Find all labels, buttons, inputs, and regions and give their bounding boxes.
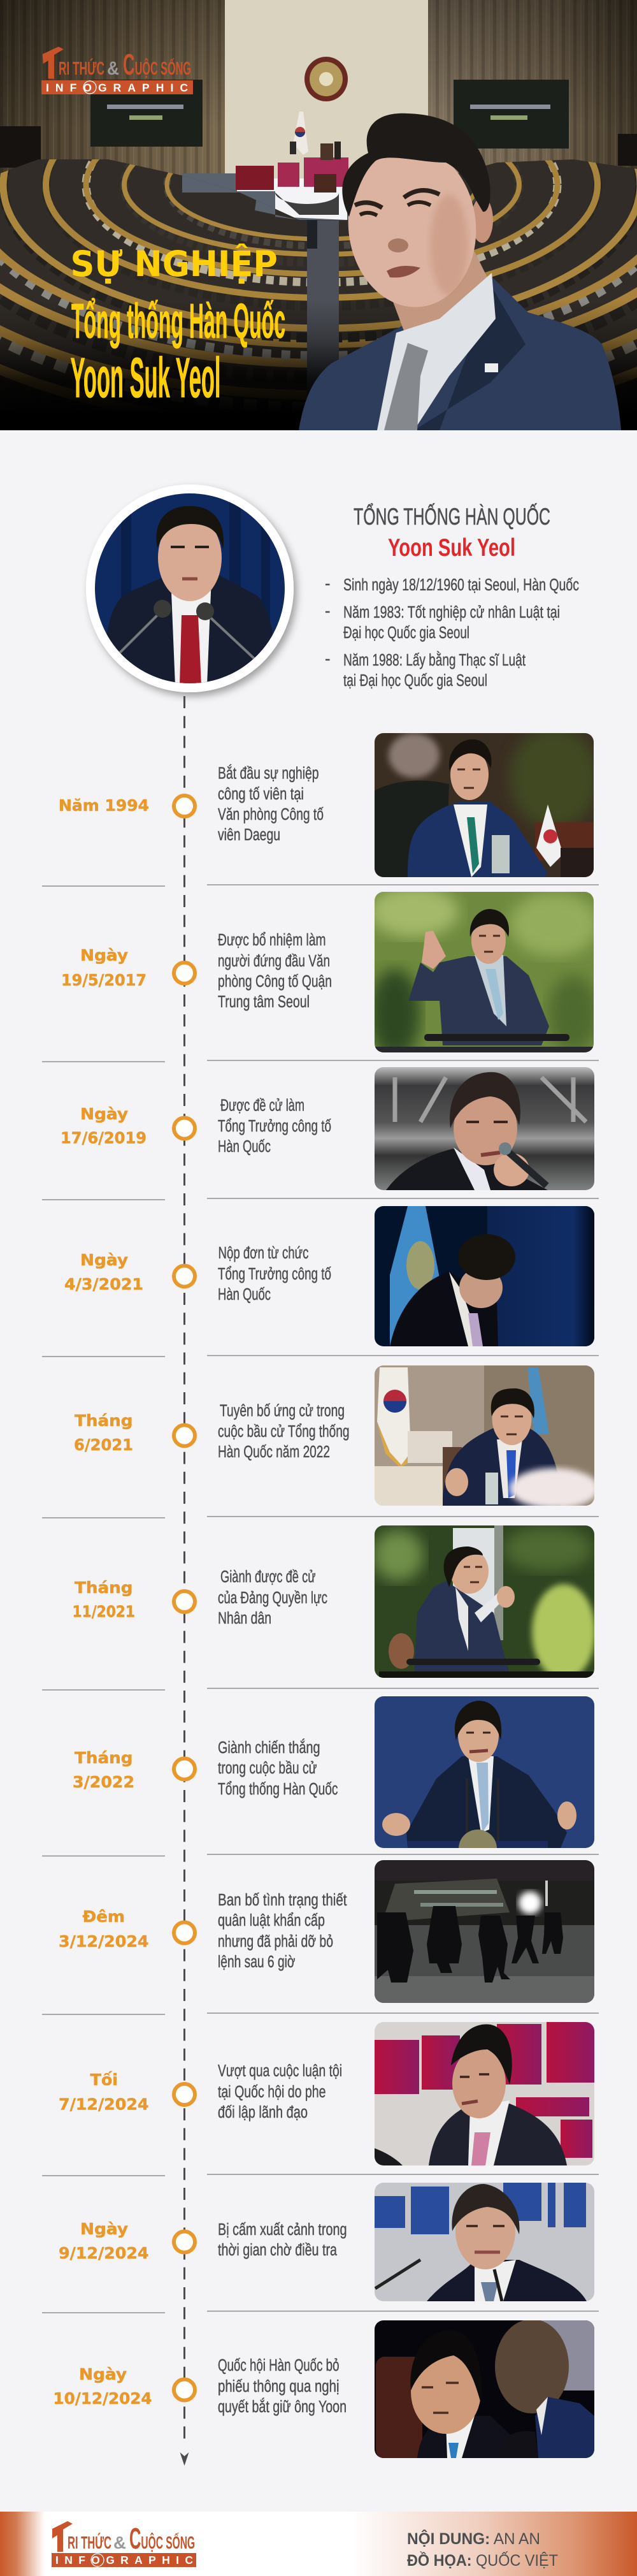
title	[70, 244, 285, 409]
description: đối lập lãnh đạo	[218, 2104, 308, 2121]
description: Bị cấm xuất cảnh trong	[218, 2221, 347, 2239]
row 1: Năm 1994	[59, 727, 599, 877]
floor	[182, 173, 348, 220]
description: Được đề cử làm	[220, 1096, 304, 1114]
profile name: Yoon Suk Yeol	[388, 534, 515, 562]
row 4: Ngày 4/3/2021	[64, 1206, 594, 1346]
row 3: Ngày 17/6/2019	[61, 1067, 594, 1190]
date	[73, 1749, 134, 1791]
description: quyết bắt giữ ông Yoon	[218, 2398, 347, 2416]
date: Ngày	[80, 1251, 128, 1269]
row 11: Ngày 10/12/2024	[54, 2319, 594, 2459]
photo: speaking into microphone	[375, 1067, 594, 1190]
ear	[473, 200, 493, 243]
description: quân luật khẩn cấp	[218, 1912, 325, 1930]
description: phòng Công tố Quận	[218, 973, 332, 991]
timeline dashed line	[180, 696, 189, 2466]
description: viên Daegu	[218, 826, 280, 844]
photo: victory speech at podium	[375, 1696, 594, 1868]
description: Bắt đầu sự nghiệp	[218, 764, 319, 783]
timeline node	[174, 2379, 195, 2401]
description	[218, 1738, 338, 1798]
description	[218, 931, 332, 1011]
description: Nộp đơn từ chức	[218, 1244, 309, 1262]
profile facts: -	[325, 650, 330, 668]
video screens	[90, 80, 203, 147]
tie	[384, 343, 428, 430]
date: 19/5/2017	[61, 971, 147, 989]
date	[74, 1411, 133, 1454]
description: Vượt qua cuộc luận tội	[218, 2062, 342, 2080]
description: lệnh sau 6 giờ	[218, 1953, 296, 1971]
title: Yoon Suk Yeol	[70, 346, 220, 409]
description	[218, 1402, 349, 1461]
photo: interview beside flags	[375, 1365, 599, 1509]
photo: President Yoon cut-out	[299, 113, 621, 430]
portrait circle	[86, 484, 294, 692]
photo: speaking before red banner	[375, 2022, 594, 2165]
date: Tối	[90, 2070, 118, 2089]
description	[218, 1096, 331, 1156]
photo: national assembly chamber	[0, 0, 637, 463]
header banner: Tổng thống Hàn Quốc	[71, 294, 285, 349]
logo infographic bar: INFOGRAPHIC	[55, 2554, 193, 2566]
date: 3/2022	[73, 1773, 134, 1791]
seating tiers	[0, 159, 637, 405]
timeline node	[174, 1591, 195, 1612]
row 5: Tháng 6/2021	[74, 1365, 599, 1509]
date: 9/12/2024	[59, 2244, 149, 2262]
description: Hàn Quốc năm 2022	[218, 1443, 330, 1461]
footer band	[0, 2512, 637, 2576]
profile facts: Đại học Quốc gia Seoul	[343, 624, 469, 642]
emblem	[304, 57, 348, 101]
eyes and brows	[355, 191, 440, 208]
photo: seated at conference with flag	[375, 727, 599, 877]
description	[218, 2062, 342, 2121]
suit	[299, 277, 621, 430]
date: 10/12/2024	[54, 2389, 152, 2408]
timeline arrow head	[180, 2452, 189, 2466]
date: 11/2021	[73, 1603, 135, 1620]
row 10: Ngày 9/12/2024	[59, 2183, 594, 2301]
date: Ngày	[80, 1105, 128, 1123]
brand logo	[41, 47, 193, 94]
profile facts: tại Đại học Quốc gia Seoul	[343, 672, 487, 690]
date: 4/3/2021	[64, 1275, 143, 1293]
neck	[393, 252, 487, 330]
profile facts: -	[325, 602, 330, 620]
description: tại Quốc hội do phe	[218, 2083, 326, 2101]
date	[64, 1251, 143, 1293]
flag	[293, 112, 308, 155]
logo wordmark: RI THỨC	[68, 2533, 111, 2552]
date: 7/12/2024	[59, 2095, 149, 2114]
description	[218, 1568, 327, 1627]
description: trong cuộc bầu cử	[218, 1759, 317, 1777]
description	[218, 764, 324, 844]
date	[73, 1578, 135, 1620]
description: Tổng Trưởng công tố	[218, 1265, 331, 1283]
description: Nhân dân	[218, 1610, 271, 1627]
date: Năm 1994	[59, 796, 149, 815]
logo infographic bar: INFOGRAPHIC	[46, 82, 188, 94]
timeline node	[174, 2084, 195, 2105]
description: Hàn Quốc	[218, 1286, 271, 1304]
timeline node	[174, 1758, 195, 1780]
podium	[236, 166, 274, 190]
photo: soldiers at night	[375, 1860, 594, 2003]
description: người đứng đầu Văn	[218, 952, 330, 970]
shirt	[377, 273, 496, 430]
description: Tuyên bố ứng cử trong	[220, 1402, 345, 1420]
description	[218, 1891, 347, 1971]
title: SỰ NGHIỆP	[70, 244, 278, 284]
description: phiếu thông qua nghị	[218, 2378, 339, 2396]
credits: ĐỒ HỌA: QUỐC VIỆT	[407, 2551, 558, 2570]
description: công tố viên tại	[218, 785, 304, 803]
logo wordmark: &	[113, 2533, 126, 2552]
date: Tháng	[75, 1578, 132, 1597]
description	[218, 2357, 347, 2416]
profile facts: Năm 1983: Tốt nghiệp cử nhân Luật tại	[343, 604, 560, 622]
date	[61, 946, 147, 989]
row 9: Tối 7/12/2024	[59, 2022, 594, 2165]
description: Ban bố tình trạng thiết	[218, 1891, 347, 1909]
profile panel	[86, 484, 579, 692]
description	[218, 2221, 347, 2259]
timeline node	[174, 1266, 195, 1286]
row dividers	[42, 885, 599, 2313]
description: Quốc hội Hàn Quốc bỏ	[218, 2357, 339, 2375]
description: Hàn Quốc	[218, 1138, 271, 1156]
timeline node	[174, 1923, 195, 1943]
photo: smiling beside another leader	[375, 2319, 594, 2459]
timeline node	[174, 1118, 195, 1139]
logo wordmark: CUỘC SỐNG	[123, 48, 191, 81]
logo T mark	[52, 2521, 73, 2552]
timeline node	[174, 2231, 195, 2253]
logo wordmark	[68, 2522, 195, 2555]
photo: press conference before blue banner	[375, 2183, 594, 2301]
logo wordmark	[59, 48, 191, 81]
row 2: Ngày 19/5/2017	[61, 886, 599, 1058]
date: 6/2021	[74, 1436, 133, 1454]
photo: waving from car	[369, 886, 599, 1058]
logo T mark	[43, 47, 64, 79]
date	[59, 1907, 149, 1951]
description	[218, 1244, 331, 1304]
date	[61, 1105, 147, 1147]
face	[348, 158, 476, 307]
description: thời gian chờ điều tra	[218, 2241, 338, 2259]
profile facts	[325, 575, 579, 690]
date: Tháng	[75, 1749, 132, 1767]
photo: bowing before flag	[375, 1206, 594, 1346]
flag pin	[485, 363, 498, 372]
description: Trung tâm Seoul	[218, 993, 310, 1011]
timeline node	[174, 796, 195, 817]
description: cuộc bầu cử Tổng thống	[218, 1423, 349, 1441]
description: Giành chiến thắng	[218, 1738, 320, 1757]
description: của Đảng Quyền lực	[218, 1589, 327, 1607]
description: Giành được đề cử	[220, 1568, 316, 1586]
center aisle	[307, 220, 339, 411]
logo wordmark: RI THỨC	[59, 57, 104, 79]
footer logo	[52, 2521, 196, 2567]
description: Tổng Trưởng công tố	[218, 1117, 331, 1135]
date: Ngày	[79, 2365, 127, 2383]
date	[59, 2070, 149, 2114]
photo: fist raised from car	[373, 1525, 596, 1680]
date: Đêm	[83, 1907, 125, 1926]
logo wordmark: &	[107, 58, 119, 79]
date: Ngày	[80, 946, 128, 964]
profile facts: -	[325, 575, 330, 593]
profile facts: Năm 1988: Lấy bằng Thạc sĩ Luật	[343, 651, 526, 669]
date	[59, 2220, 149, 2262]
row 7: Tháng 3/2022	[73, 1696, 594, 1868]
date	[54, 2365, 152, 2408]
description: Được bổ nhiệm làm	[218, 931, 326, 949]
hair	[342, 113, 490, 217]
credits: NỘI DUNG: AN AN	[407, 2529, 540, 2548]
date: Ngày	[80, 2220, 128, 2238]
row 6: Tháng 11/2021	[73, 1525, 596, 1680]
header banner	[0, 0, 637, 463]
row 8: Đêm 3/12/2024	[59, 1860, 594, 2003]
date: 17/6/2019	[61, 1128, 147, 1147]
logo wordmark: CUỘC SỐNG	[129, 2522, 195, 2555]
credits	[407, 2529, 558, 2570]
date: Tháng	[75, 1411, 132, 1430]
nose and mouth	[388, 238, 408, 252]
description: nhưng đã phải dỡ bỏ	[218, 1933, 333, 1951]
description: Văn phòng Công tố	[218, 806, 324, 824]
timeline node	[174, 963, 195, 984]
description: Tổng thống Hàn Quốc	[218, 1780, 338, 1798]
date: 3/12/2024	[59, 1932, 149, 1951]
timeline node	[174, 1425, 195, 1446]
